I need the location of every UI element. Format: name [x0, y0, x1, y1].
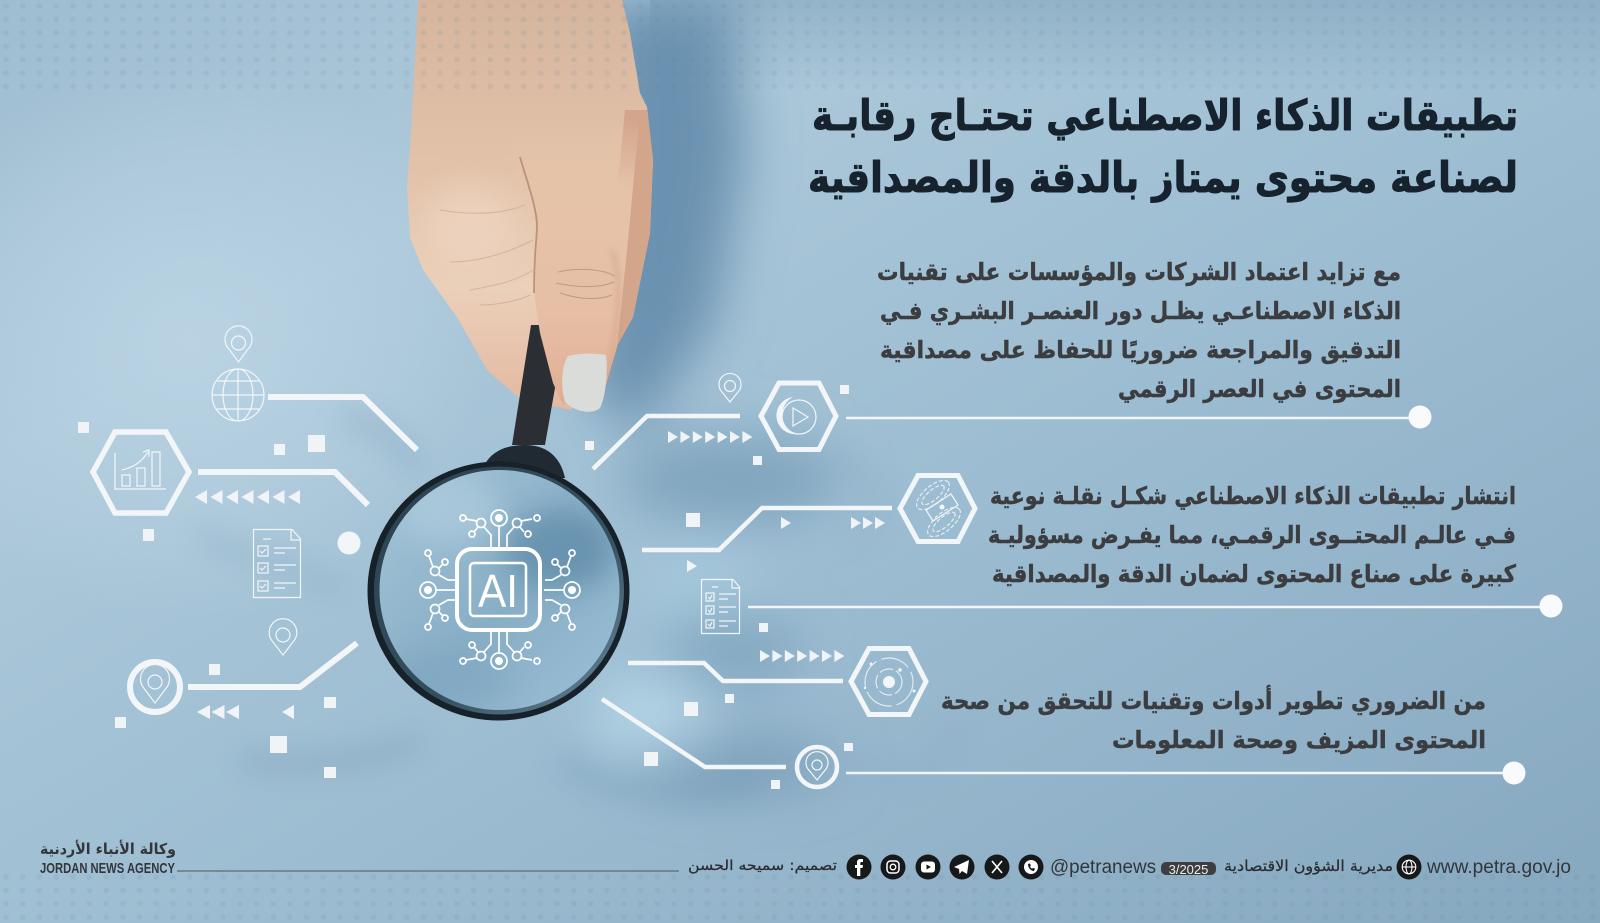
rule 3 with dot [846, 762, 1526, 784]
footer [40, 840, 1571, 880]
text block 1: المحتوى في العصر الرقمي [1118, 375, 1401, 403]
date badge: 3/2025 [1169, 862, 1208, 877]
arrows right 1 [668, 431, 752, 443]
text block 3: المحتوى المزيف وصحة المعلومات [1112, 726, 1486, 754]
connector 4 [602, 699, 786, 767]
connector 1 [593, 416, 740, 469]
arrows left lower [197, 705, 294, 719]
icon: location pin right [719, 373, 741, 402]
agency logo [40, 840, 176, 877]
social icons [846, 854, 1422, 880]
connector 3 [628, 663, 843, 681]
arrows left [195, 490, 300, 504]
footer rule [177, 870, 679, 872]
icon: location ring [130, 662, 180, 712]
website: www.petra.gov.jo [1426, 857, 1571, 878]
title [808, 91, 1518, 203]
icon: play hexagon [761, 383, 836, 450]
hand: palm and back fingers [407, 0, 660, 410]
rule 2 with dot [748, 594, 1562, 618]
icon: chart hexagon [93, 432, 189, 513]
icon: location pin lower [269, 619, 297, 655]
social handle: @petranews [1050, 857, 1156, 878]
text block 3: من الضروري تطوير أدوات وتقنيات للتحقق من صحة [941, 685, 1486, 715]
text block 1: الذكاء الاصطناعـي يظـل دور العنصـر البشـري فـي [880, 297, 1401, 325]
text block 1: مع تزايد اعتماد الشركات والمؤسسات على تقنيات [877, 258, 1401, 286]
connector line top [268, 397, 417, 450]
left network diagram [78, 326, 417, 778]
right network diagram [585, 373, 1562, 789]
icon: orbit hexagon [851, 648, 926, 714]
text block 2: انتشار تطبيقات الذكاء الاصطناعي شكـل نقلـة نوعية [990, 482, 1516, 510]
department: مديرية الشؤون الاقتصادية [1224, 857, 1393, 875]
AI chip icon [420, 510, 580, 669]
connector line lower [188, 643, 357, 687]
arrows right 2 [687, 517, 885, 572]
magnifying glass [368, 445, 630, 720]
text block 2: فـي عالـم المحتــوى الرقمـي، مما يفـرض مسؤوليـة [988, 521, 1516, 549]
icon: globe [212, 369, 264, 421]
decorative dot [338, 532, 360, 554]
title: لصناعة محتوى يمتاز بالدقة والمصداقية [808, 153, 1518, 203]
agency logo: وكالة الأنباء الأردنية [40, 840, 176, 858]
connector line middle [198, 472, 368, 505]
text block 1 [877, 258, 1401, 403]
agency logo: JORDAN NEWS AGENCY [40, 860, 175, 877]
arrows right 3 [760, 650, 844, 662]
text block 2 [988, 482, 1516, 588]
text block 1: التدقيق والمراجعة ضروريًا للحفاظ على مصداقية [880, 336, 1401, 364]
connector 2 [642, 508, 892, 550]
thumb [505, 110, 640, 412]
square markers [585, 385, 853, 789]
AI chip icon: AI [478, 565, 518, 617]
designer credit: تصميم: سميحه الحسن [688, 858, 837, 874]
square markers [78, 422, 336, 778]
icon: checklist document small [702, 580, 740, 634]
icon: location pin top [225, 326, 252, 362]
icon: checklist document [254, 530, 300, 598]
icon: security hexagon [900, 475, 975, 542]
icon: location ring right [797, 747, 837, 787]
text block 2: كبيرة على صناع المحتوى لضمان الدقة والمصداقية [992, 560, 1516, 588]
magnifier handle [512, 325, 566, 445]
thumb nail [562, 354, 607, 412]
text block 3 [941, 685, 1486, 754]
rule 1 with dot [846, 406, 1432, 428]
